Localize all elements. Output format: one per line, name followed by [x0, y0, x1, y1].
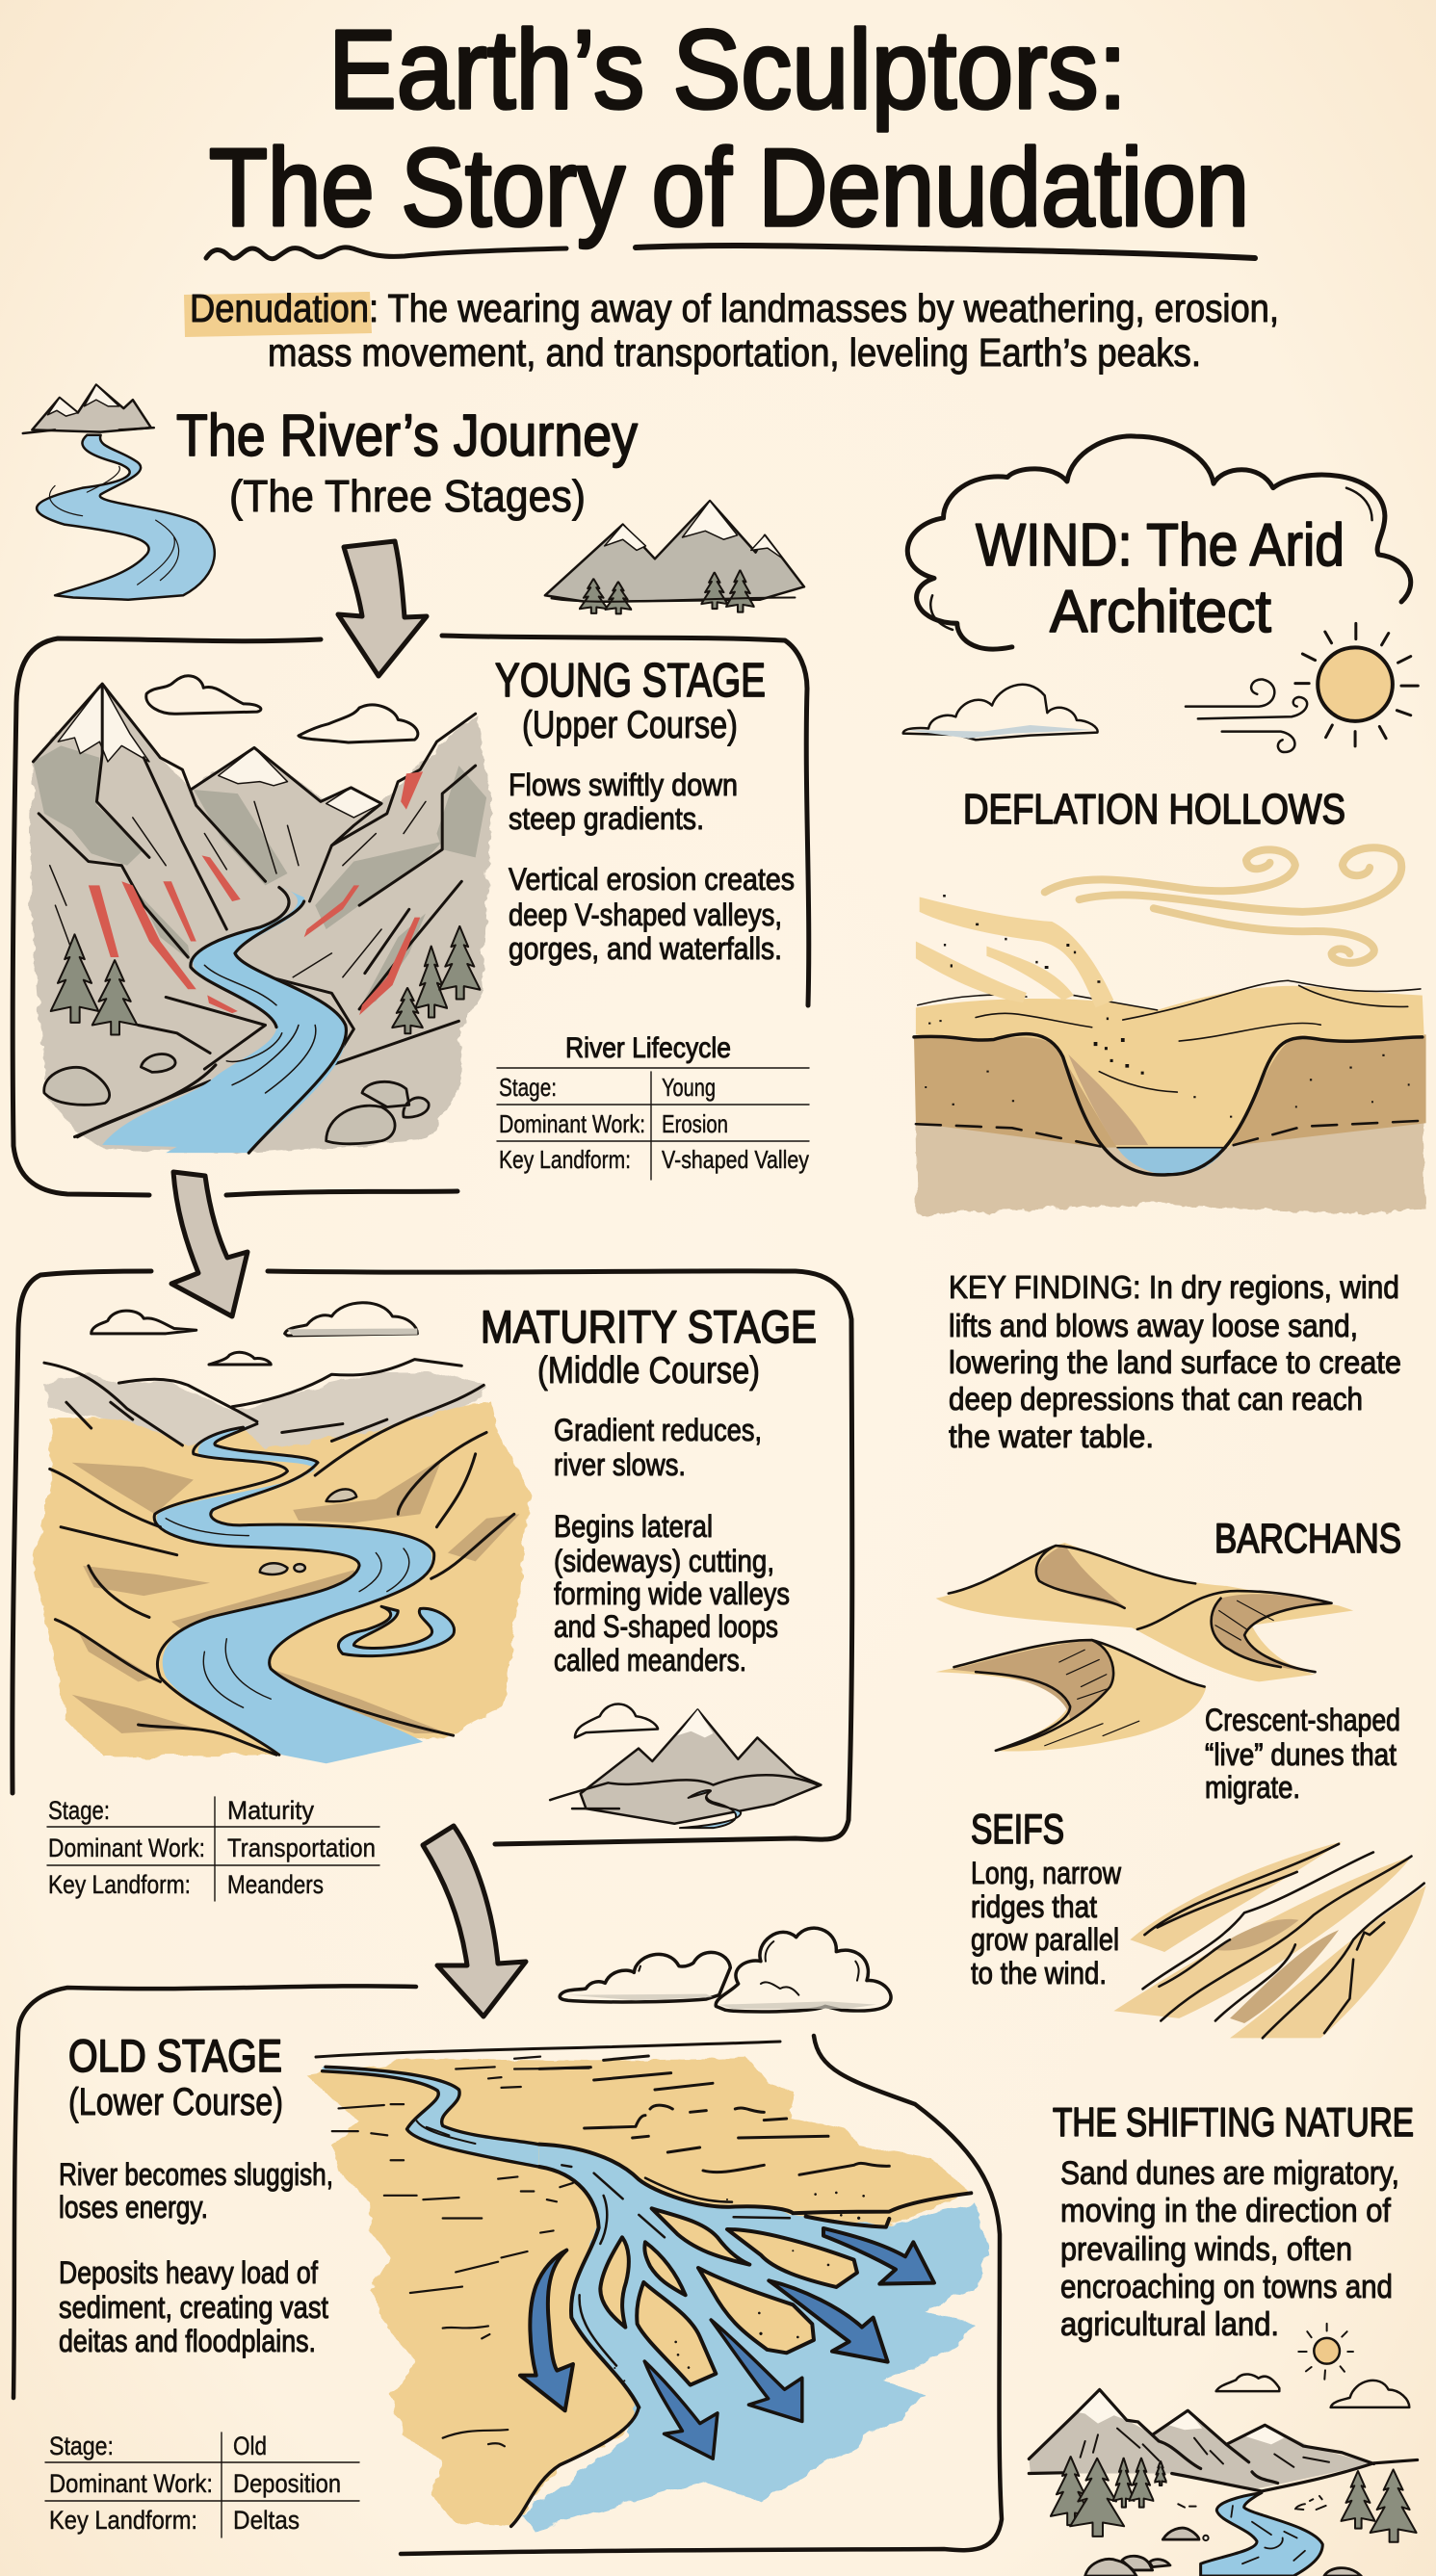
definition text: mass movement, and transportation, leveling Earth’s peaks.: [268, 330, 1201, 375]
table: maturity: Meanders: [227, 1870, 324, 1899]
barchan description: [1205, 1703, 1400, 1805]
illustration: delta distributaries: [520, 2056, 971, 2410]
stage heading: MATURITY STAGE: [481, 1301, 817, 1352]
stage heading: (Lower Course): [68, 2081, 283, 2123]
icon: mountain with stream: [550, 1704, 821, 1828]
wind heading: [976, 512, 1345, 645]
stage heading: [495, 655, 766, 746]
table: river lifecycle young: River Lifecycle: [565, 1032, 731, 1064]
key finding text: the water table.: [949, 1418, 1154, 1454]
table: old: Stage:: [49, 2432, 114, 2460]
panel: young stage: [13, 636, 809, 1195]
stage description: gorges, and waterfalls.: [509, 931, 782, 966]
title: The Story of Denudation: [209, 127, 1249, 249]
stage description: Begins lateral: [554, 1509, 713, 1544]
stage heading: [68, 2030, 283, 2123]
shifting nature text: [1060, 2155, 1399, 2343]
stage description: steep gradients.: [509, 801, 704, 836]
title underline: [206, 246, 1255, 259]
icon: clouds: [560, 1928, 891, 2012]
shifting nature text: agricultural land.: [1060, 2306, 1279, 2343]
barchan description: migrate.: [1205, 1770, 1300, 1805]
table: old: Deposition: [233, 2469, 341, 2498]
illustration: V-shaped valley: [31, 676, 492, 1153]
stage description: Vertical erosion creates: [509, 862, 795, 897]
heading: seifs: SEIFS: [971, 1807, 1064, 1853]
arrow: into young stage: [338, 541, 427, 676]
table: old: Dominant Work:: [49, 2469, 213, 2498]
stage description: and S-shaped loops: [554, 1609, 778, 1644]
seifs description: grow parallel: [971, 1922, 1119, 1957]
seifs description: ridges that: [971, 1889, 1097, 1924]
stage description: deitas and floodplains.: [59, 2324, 316, 2358]
title: Earth’s Sculptors:: [328, 7, 1127, 132]
barchan description: “live” dunes that: [1205, 1737, 1397, 1772]
stage description: River becomes sluggish,: [59, 2157, 333, 2192]
stage heading: [481, 1301, 817, 1392]
arrow: maturity to old: [423, 1826, 526, 2017]
definition text: Denudation: The wearing away of landmasses by weathering, erosion,: [190, 286, 1279, 330]
key finding text: lifts and blows away loose sand,: [949, 1308, 1358, 1343]
icon: mountain and river: [23, 385, 215, 600]
key finding text: [949, 1269, 1401, 1454]
table: maturity: Key Landform:: [48, 1870, 191, 1899]
table: maturity: Stage:: [48, 1796, 110, 1825]
panel: old stage: [13, 1986, 1002, 2554]
table: maturity: Transportation: [227, 1834, 376, 1862]
shifting nature text: prevailing winds, often: [1060, 2231, 1352, 2268]
stage description: [509, 768, 795, 966]
panel frame: [13, 636, 809, 1195]
illustration: seif dunes: [1113, 1841, 1426, 2038]
stage description: loses energy.: [59, 2190, 208, 2225]
section heading: river journey: The River’s Journey: [176, 403, 638, 468]
stage description: sediment, creating vast: [59, 2290, 328, 2325]
key finding text: deep depressions that can reach: [949, 1381, 1363, 1417]
stage description: Gradient reduces,: [554, 1413, 762, 1447]
panel frame: [13, 1986, 416, 2398]
stage heading: (Upper Course): [522, 704, 738, 746]
stage heading: (Middle Course): [537, 1350, 760, 1392]
seifs description: to the wind.: [971, 1956, 1107, 1991]
table: maturity: Dominant Work:: [48, 1834, 205, 1862]
illustration: landscape with river: [1029, 2324, 1418, 2576]
stage description: Deposits heavy load of: [59, 2255, 318, 2290]
key finding text: KEY FINDING: In dry regions, wind: [949, 1269, 1399, 1305]
stage description: deep V-shaped valleys,: [509, 898, 782, 932]
panel: maturity stage: [13, 1271, 852, 1901]
table: river lifecycle young: Key Landform:: [499, 1145, 631, 1174]
stage description: [59, 2157, 333, 2358]
stage heading: YOUNG STAGE: [495, 655, 766, 707]
delta lower arrows and shore: [511, 2320, 802, 2526]
panel frame: [13, 1271, 852, 1844]
table: river lifecycle young: Erosion: [662, 1109, 728, 1138]
table: maturity: [47, 1796, 379, 1901]
stage heading: OLD STAGE: [68, 2030, 282, 2081]
shifting nature text: moving in the direction of: [1060, 2193, 1392, 2229]
definition text: [190, 286, 1279, 375]
seifs description: [971, 1856, 1122, 1991]
shifting nature text: Sand dunes are migratory,: [1060, 2155, 1399, 2192]
wind heading: Architect: [1050, 579, 1271, 645]
stage description: called meanders.: [554, 1643, 746, 1678]
stage description: forming wide valleys: [554, 1576, 790, 1611]
section heading: river journey: [176, 403, 638, 521]
table: old: Old: [233, 2432, 267, 2460]
table: river lifecycle young: Young: [662, 1073, 716, 1102]
heading: deflation hollows: DEFLATION HOLLOWS: [963, 786, 1345, 833]
section heading: river journey: (The Three Stages): [229, 471, 586, 521]
seifs description: Long, narrow: [971, 1856, 1122, 1890]
wind heading: WIND: The Arid: [976, 512, 1345, 579]
title: [209, 7, 1249, 249]
icon: mountains with trees: [545, 501, 804, 613]
illustration: meanders: [33, 1303, 531, 1763]
table: maturity: Maturity: [227, 1796, 314, 1825]
illustration: delta land and sea: [306, 2057, 990, 2532]
illustration: deflation hollow cross-section: [914, 847, 1426, 1214]
stage description: (sideways) cutting,: [554, 1544, 774, 1578]
table: river lifecycle young: Stage:: [499, 1073, 557, 1102]
icon: sun, wind and cloud: [903, 623, 1418, 752]
shifting nature text: encroaching on towns and: [1060, 2269, 1393, 2305]
table: river lifecycle young: Dominant Work:: [499, 1109, 645, 1138]
table: river lifecycle young: V-shaped Valley: [662, 1145, 809, 1174]
panel: wind: [903, 436, 1426, 2576]
table: river lifecycle young: [497, 1032, 809, 1180]
stage description: [554, 1413, 790, 1678]
table: old: [45, 2432, 359, 2537]
cloud heading shape: [907, 436, 1411, 649]
key finding text: lowering the land surface to create: [949, 1344, 1401, 1380]
definition highlight: [184, 292, 372, 337]
stage description: river slows.: [554, 1447, 686, 1482]
table: old: Deltas: [233, 2506, 300, 2535]
barchan description: Crescent-shaped: [1205, 1703, 1400, 1737]
illustration: barchan dunes: [936, 1543, 1353, 1751]
table: old: Key Landform:: [49, 2506, 197, 2535]
stage description: Flows swiftly down: [509, 768, 738, 802]
arrow: young to maturity: [171, 1172, 248, 1316]
